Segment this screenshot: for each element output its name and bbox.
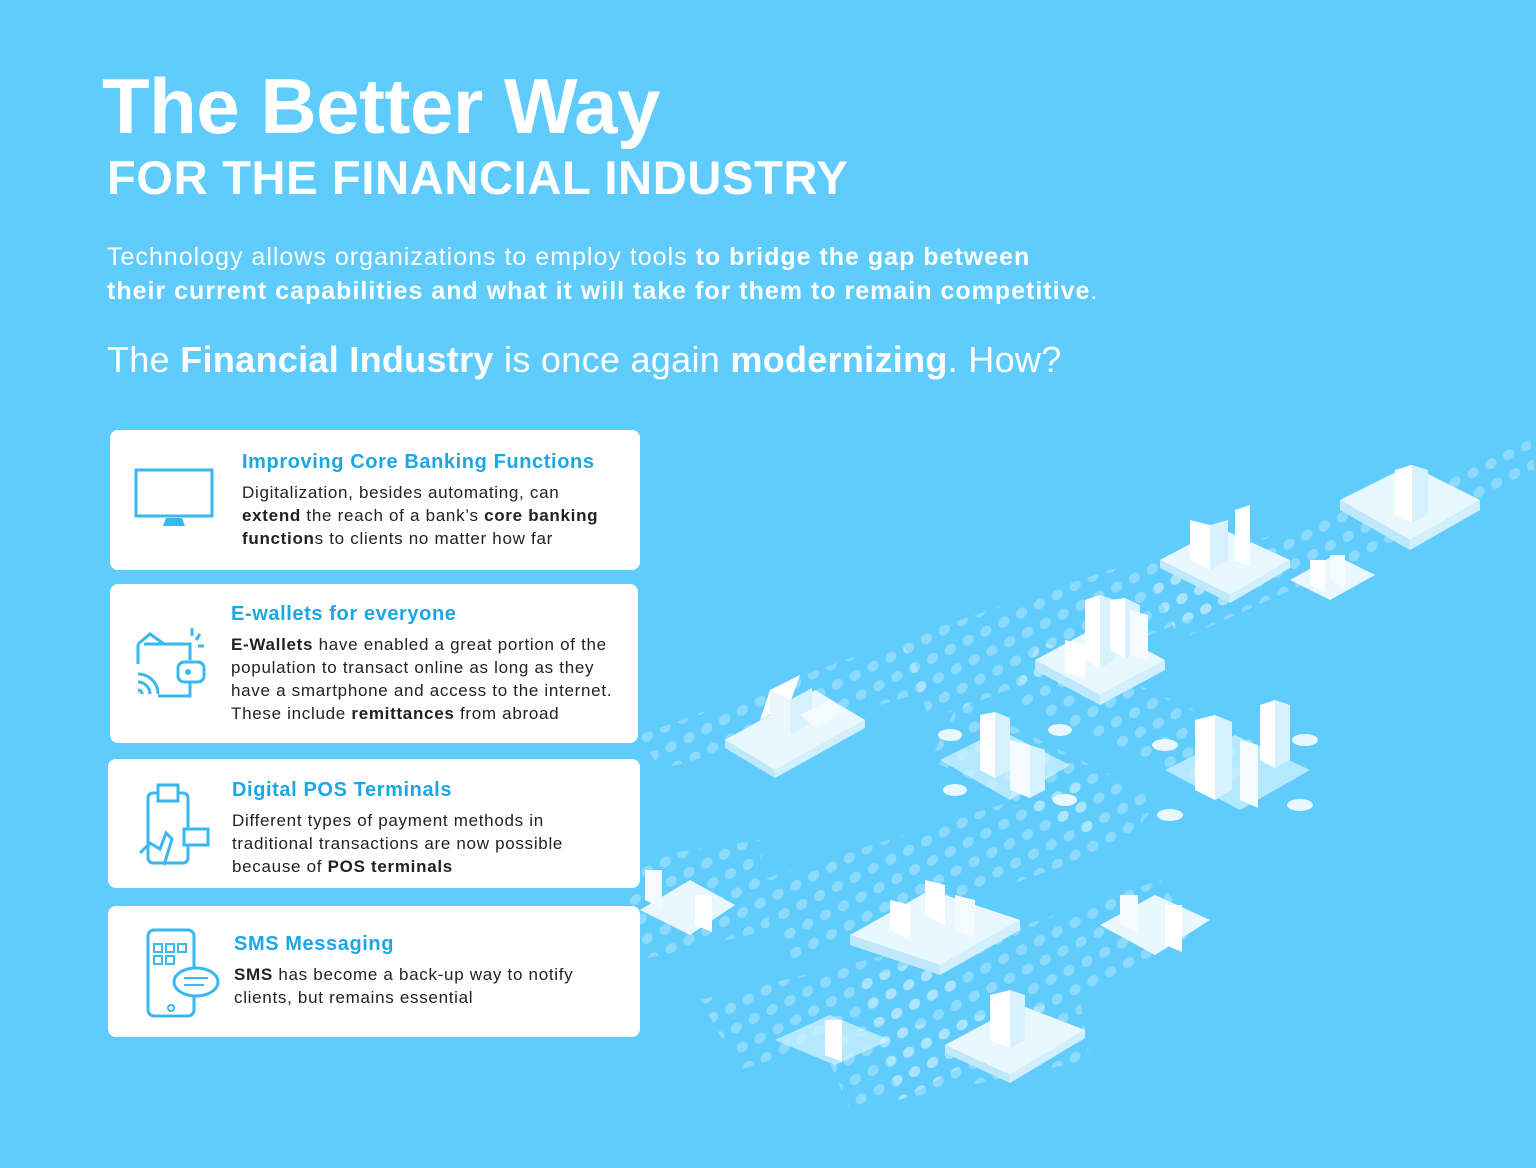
text: E-Wallets have enabled a great portion of the <box>231 635 607 654</box>
island: left edge <box>640 870 735 935</box>
title: The Better Way <box>102 62 660 150</box>
intro text: Technology allows organizations to employ tools to bridge the gap between <box>107 243 1030 271</box>
panel: SMS messaging <box>108 906 640 1037</box>
intro text: their current capabilities and what it will take for them to remain competitive. <box>107 277 1098 305</box>
island: bottom left hub <box>775 1015 890 1065</box>
text: because of POS terminals <box>232 857 453 876</box>
island: cross hub right <box>1152 700 1318 821</box>
dot trails <box>620 440 1536 1110</box>
intro text <box>107 243 1098 305</box>
heading: Digital POS Terminals <box>232 779 452 801</box>
text: Different types of payment methods in <box>232 811 544 830</box>
text: extend the reach of a bank’s core banking <box>242 506 598 525</box>
text <box>242 483 598 548</box>
island: phone city left <box>725 675 865 778</box>
text <box>232 811 563 876</box>
icon: POS terminal <box>139 784 210 866</box>
panel: core banking <box>110 430 640 570</box>
text: SMS has become a back-up way to notify <box>234 965 573 984</box>
text: Digitalization, besides automating, can <box>242 483 559 502</box>
subtitle: FOR THE FINANCIAL INDUSTRY <box>107 151 848 204</box>
text: clients, but remains essential <box>234 988 473 1007</box>
island: small houses <box>1290 555 1375 600</box>
text: These include remittances from abroad <box>231 704 559 723</box>
island: tall towers <box>1035 595 1165 705</box>
icon: monitor <box>134 468 214 526</box>
island: bottom phone <box>945 990 1085 1083</box>
text: population to transact online as long as they <box>231 658 594 677</box>
island: upper city <box>1160 505 1290 603</box>
text: have a smartphone and access to the internet. <box>231 681 612 700</box>
heading: SMS Messaging <box>234 933 394 955</box>
heading: E-wallets for everyone <box>231 603 457 625</box>
icon: phone with chat <box>146 928 220 1018</box>
heading: Improving Core Banking Functions <box>242 451 595 473</box>
icon: wallet <box>136 628 206 698</box>
text <box>231 635 612 723</box>
island: cross hub middle <box>938 712 1077 806</box>
panel: e-wallets <box>110 584 638 743</box>
panel: POS terminals <box>108 759 640 888</box>
question heading: The Financial Industry is once again modernizing. How? <box>107 339 1062 380</box>
text <box>234 965 573 1007</box>
text: traditional transactions are now possible <box>232 834 563 853</box>
text: functions to clients no matter how far <box>242 529 553 548</box>
island: lower middle <box>850 880 1020 975</box>
island: top right phone <box>1340 465 1480 550</box>
island: lower right <box>1100 895 1210 955</box>
